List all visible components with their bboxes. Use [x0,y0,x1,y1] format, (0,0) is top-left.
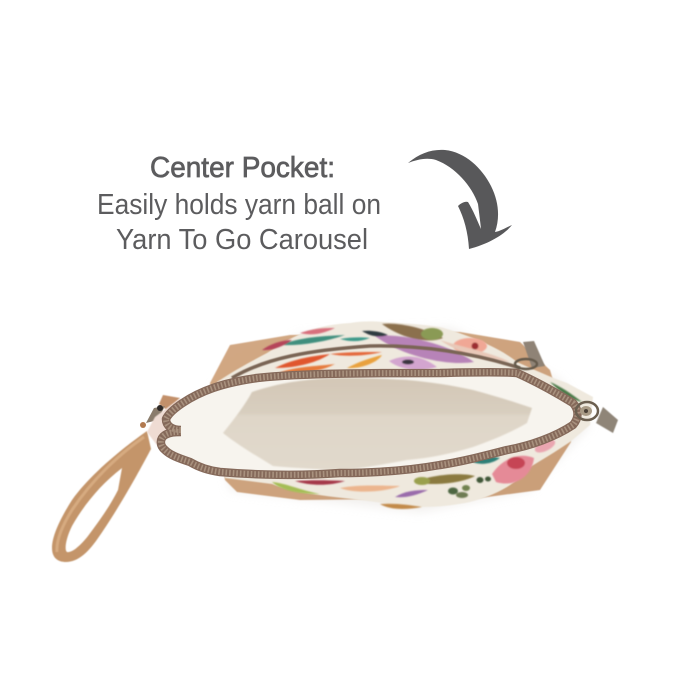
product: open zip pouch [52,321,618,562]
leather end tab left [159,395,180,411]
floral fabric body [217,321,593,507]
description line 1: Easily holds yarn ball on [97,189,381,221]
zipper pull and tab right top [515,341,545,369]
icon: curved arrow pointing down [408,150,512,249]
top print: leaves and blooms [382,324,443,340]
description line 2: Yarn To Go Carousel [116,224,368,256]
pouch interior: beige canvas [223,378,532,470]
text block: center pocket caption [97,152,381,256]
main zipper [161,372,578,475]
strap highlight [57,437,144,552]
outer pocket zipper [232,346,520,378]
floral print [262,324,582,509]
pale fabric at left tip [147,398,180,452]
pouch opening: white lining [161,372,578,475]
wrist strap [52,431,151,562]
soft shadow [215,328,590,512]
leather base panel [210,332,571,500]
grey leather zipper tab right [596,407,618,433]
zipper pull left [140,405,165,428]
zipper slider right [576,402,598,420]
zipper teeth [161,372,578,475]
heading: Center Pocket: Center Pocket: [150,152,335,184]
bottom print: blooms and leaves [492,456,534,484]
